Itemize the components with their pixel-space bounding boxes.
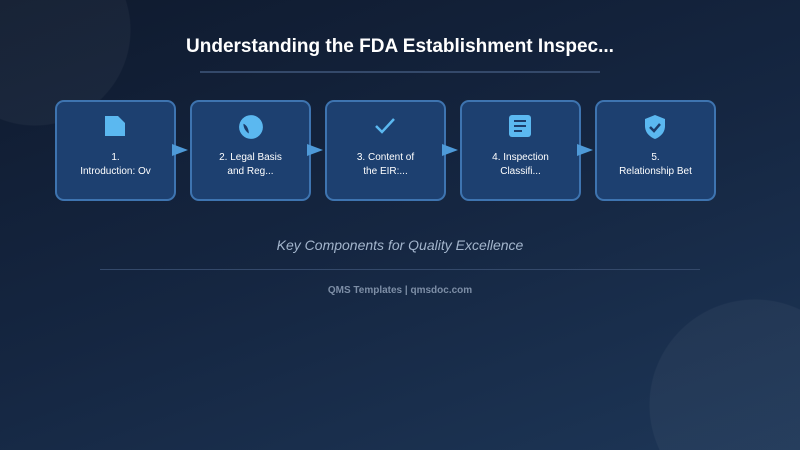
panel: step 2: 2. Legal Basis xyxy=(219,152,282,163)
panel: step 3: 3. Content of xyxy=(357,152,414,163)
icon: document xyxy=(105,116,125,136)
icon: shield xyxy=(645,115,665,139)
arrow 3 xyxy=(442,144,458,156)
panel: step 3: the EIR:... xyxy=(363,166,408,177)
icon: check xyxy=(375,118,395,134)
panel: step 5: Relationship Bet xyxy=(619,166,692,177)
panel: step 1: Introduction: Ov xyxy=(80,166,151,177)
arrow 2 xyxy=(307,144,323,156)
subtitle: Key Components for Quality Excellence xyxy=(277,237,523,253)
panel: step 1: 1. xyxy=(111,152,120,163)
arrow 1 xyxy=(172,144,188,156)
panel: step 2 xyxy=(190,100,311,201)
panel: step 4: 4. Inspection xyxy=(492,152,549,163)
panel: step 5 xyxy=(595,100,716,201)
panel: step 2: and Reg... xyxy=(227,166,274,177)
panel: step 4: Classifi... xyxy=(500,166,541,177)
panel: step 1 xyxy=(55,100,176,201)
panel: step 4 xyxy=(460,100,581,201)
panel: step 3 xyxy=(325,100,446,201)
icon: list xyxy=(509,115,531,137)
icon: globe xyxy=(239,115,263,139)
footer: QMS Templates | qmsdoc.com xyxy=(328,285,472,296)
panel: step 5: 5. xyxy=(651,152,660,163)
arrow 4 xyxy=(577,144,593,156)
title: Understanding the FDA Establishment Inspec... xyxy=(186,36,614,57)
